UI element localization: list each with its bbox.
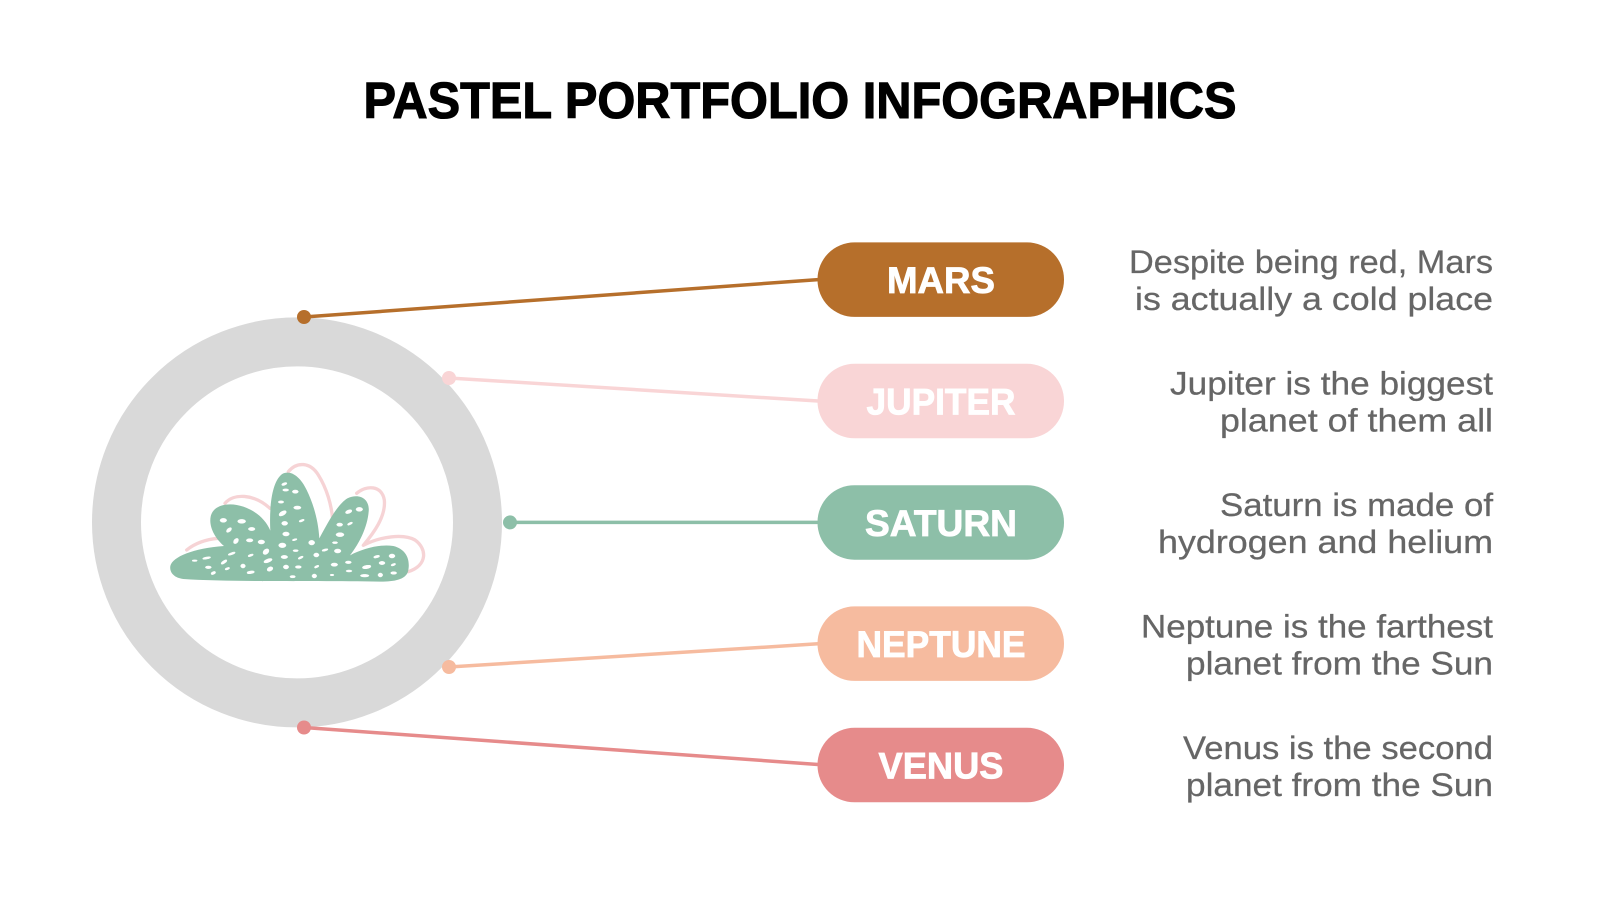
row: Mars: [297, 242, 1493, 324]
description: Venus: [1183, 730, 1493, 803]
description: Neptune: Neptune is the farthest: [1141, 608, 1493, 644]
icon: green plant: [170, 465, 424, 582]
plant green silhouette: [170, 473, 409, 582]
row: Venus: [297, 720, 1493, 803]
description: Mars: Despite being red, Mars: [1129, 244, 1493, 280]
description: Venus: planet from the Sun: [1186, 767, 1493, 803]
title: PASTEL PORTFOLIO INFOGRAPHICS: [364, 72, 1236, 129]
pill: Venus: [818, 728, 1064, 802]
pill: Mars: [818, 242, 1064, 317]
connector: Neptune: [442, 644, 818, 674]
description: Jupiter: [1170, 366, 1493, 438]
pill: Saturn: SATURN: [865, 503, 1017, 544]
pill: Jupiter: [818, 364, 1064, 438]
connector: Saturn: [503, 515, 818, 529]
description: Neptune: [1141, 608, 1493, 682]
description: Saturn: hydrogen and helium: [1158, 524, 1493, 560]
description: Neptune: planet from the Sun: [1186, 646, 1493, 682]
plant white speckles: [192, 482, 397, 578]
row: Jupiter: [442, 364, 1493, 438]
pill: Mars: MARS: [887, 260, 995, 301]
pill: Neptune: NEPTUNE: [856, 624, 1026, 665]
row: Saturn: [503, 485, 1493, 560]
pill: Neptune: [818, 606, 1064, 681]
plant pink outline: [187, 465, 424, 572]
description: Saturn: [1158, 487, 1493, 560]
pill: Saturn: [818, 485, 1064, 560]
connector: Jupiter: [442, 371, 818, 401]
connector: Mars: [297, 280, 818, 324]
description: Jupiter: Jupiter is the biggest: [1170, 366, 1493, 402]
ring: [116, 342, 478, 703]
description: Jupiter: planet of them all: [1220, 402, 1493, 438]
description: Saturn: Saturn is made of: [1220, 487, 1493, 523]
description: Mars: [1129, 244, 1493, 317]
connector: Venus: [297, 720, 818, 764]
pill: Venus: VENUS: [878, 746, 1004, 786]
pill: Jupiter: JUPITER: [866, 382, 1016, 422]
row: Neptune: [442, 606, 1493, 682]
description: Mars: is actually a cold place: [1135, 281, 1493, 317]
description: Venus: Venus is the second: [1183, 730, 1493, 766]
